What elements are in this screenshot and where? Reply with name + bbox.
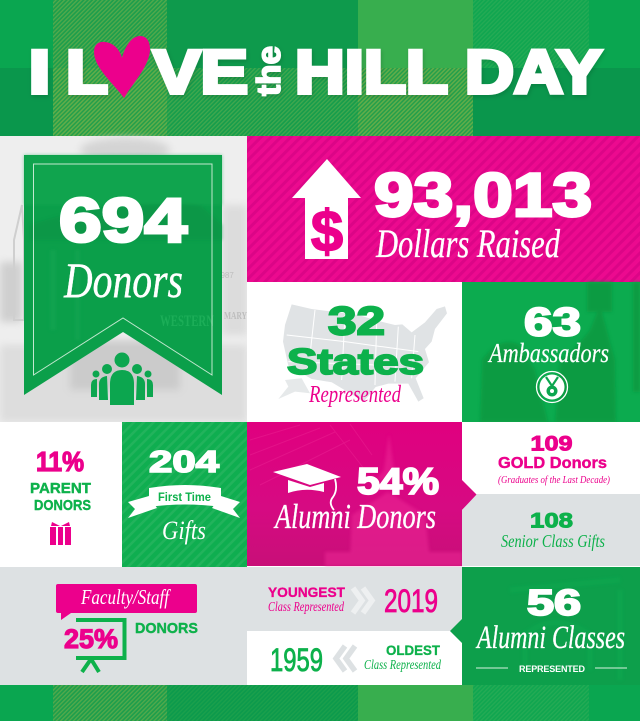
icon: gift — [50, 522, 71, 545]
25% figure: 25% — [64, 624, 118, 654]
11% figure: 11% — [36, 446, 84, 477]
icon: chevrons right — [353, 588, 372, 613]
ambassadors label: Ambassadors — [487, 338, 609, 368]
title: the — [250, 46, 287, 96]
speech bubble: Faculty/Staff — [80, 585, 172, 609]
title: DAY — [465, 38, 602, 106]
panel: alumni donors — [247, 422, 477, 566]
footer plaid band — [0, 685, 640, 721]
gifts label: Gifts — [162, 516, 206, 545]
panel: gold donors — [462, 422, 640, 494]
represented label: REPRESENTED — [519, 664, 586, 674]
donors label: DONORS — [135, 620, 198, 637]
year 2019: 2019 — [384, 583, 438, 619]
header plaid background — [0, 0, 640, 136]
ribbon — [128, 485, 240, 518]
title: VE — [153, 38, 248, 106]
icon: presentation board — [76, 620, 124, 672]
icon: pink heart — [94, 36, 150, 98]
title: HILL — [295, 38, 448, 106]
senior class gifts label: Senior Class Gifts — [501, 531, 605, 551]
parent donors label: DONORS — [34, 497, 91, 514]
54% figure: 54% — [357, 461, 439, 502]
icon: up arrow with dollar sign — [292, 159, 361, 264]
panel: 694 donors banner — [24, 155, 222, 395]
class represented label: Class Represented — [268, 600, 345, 615]
694 figure: 694 — [59, 186, 188, 256]
109 figure: 109 — [530, 432, 572, 456]
panel: 694 donors banner: WESTERN — [160, 313, 214, 330]
panel: ambassadors — [462, 282, 640, 422]
panel: first time gifts — [122, 422, 247, 567]
panel: alumni classes — [450, 567, 640, 685]
panel: states represented — [247, 282, 462, 422]
parent donors label: PARENT — [30, 480, 91, 497]
icon: up arrow with dollar sign: $ — [311, 199, 343, 264]
us map — [278, 304, 447, 402]
204 figure: 204 — [149, 444, 220, 479]
graduates note: (Graduates of the Last Decade) — [498, 475, 611, 486]
panel: parent donors — [0, 422, 122, 567]
32 figure: 32 — [328, 300, 385, 344]
year 1959: 1959 — [270, 642, 323, 678]
panel: donors photo background — [0, 136, 248, 422]
panel: senior class gifts — [462, 494, 640, 566]
panel: oldest class — [247, 631, 462, 685]
panel: donors photo background: 1987 — [216, 271, 234, 280]
alumni donors label: Alumni Donors — [274, 497, 436, 536]
dollars raised label: Dollars Raised — [375, 221, 561, 266]
icon: medal — [536, 372, 568, 402]
gold donors label: GOLD Donors — [498, 455, 607, 472]
56 figure: 56 — [527, 582, 581, 623]
class represented label: Class Represented — [364, 658, 442, 673]
icon: graduation cap — [273, 464, 341, 510]
title: I — [28, 38, 50, 106]
panel: faculty staff donors — [0, 567, 247, 685]
title — [28, 38, 602, 106]
63 figure: 63 — [524, 300, 581, 344]
108 figure: 108 — [530, 510, 573, 532]
oldest label: OLDEST — [386, 642, 440, 658]
icon: chevrons left — [336, 646, 355, 671]
speech bubble — [56, 584, 197, 620]
panel: youngest class — [247, 567, 462, 631]
states label: States — [287, 341, 424, 382]
ribbon: First Time — [158, 490, 211, 504]
icon: group of people — [91, 352, 153, 405]
represented label: Represented — [308, 382, 402, 408]
title: L — [66, 38, 108, 106]
donors script label: Donors — [63, 252, 183, 308]
93,013 figure: 93,013 — [374, 161, 592, 229]
panel: dollars raised — [247, 136, 640, 282]
panel: donors photo background: MARY — [224, 311, 248, 322]
youngest label: YOUNGEST — [268, 584, 345, 600]
